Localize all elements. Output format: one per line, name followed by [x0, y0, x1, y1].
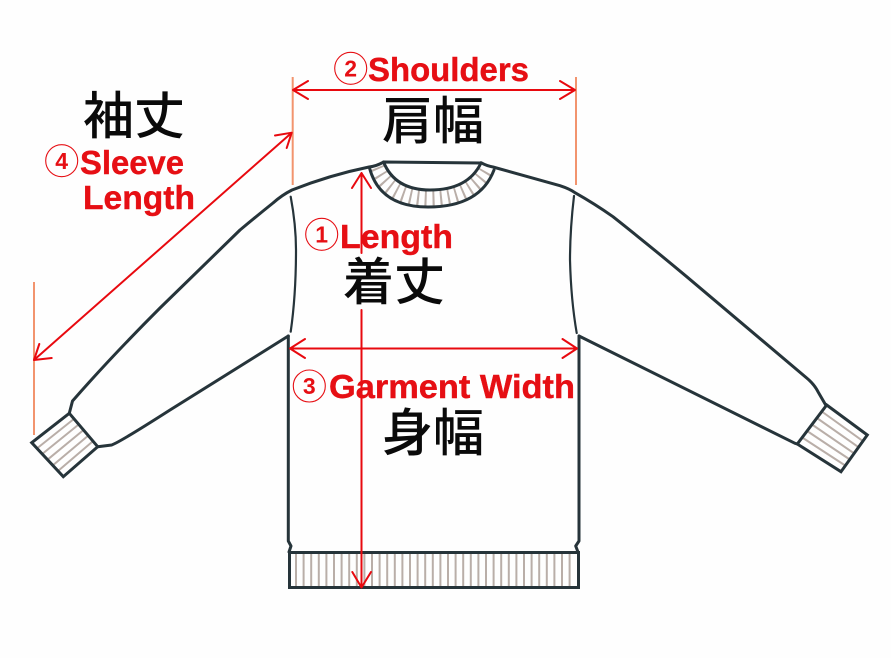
right cuff [797, 405, 867, 472]
arrow: garment width [290, 339, 577, 358]
label: sleeve length: 4 [55, 148, 68, 174]
label: sleeve length: Length [83, 179, 195, 216]
hem ribbing [290, 552, 578, 588]
arrow: shoulders [293, 81, 575, 99]
label: shoulders: 2 [344, 56, 357, 82]
label: sleeve length: Sleeve [80, 144, 184, 181]
label: length: 1 [315, 222, 328, 248]
left cuff [32, 413, 98, 477]
guide lines [34, 77, 576, 435]
label: length: Length [340, 218, 453, 255]
label: garment width: Garment Width [329, 368, 575, 405]
arrow: sleeve length [34, 133, 292, 360]
label: shoulders [335, 51, 529, 150]
label: length [306, 218, 453, 311]
sweater illustration [32, 162, 867, 588]
label: length: 着丈 [343, 254, 445, 311]
label: garment width: 3 [303, 373, 316, 399]
collar ribbing [370, 162, 494, 207]
label: garment width: 身幅 [382, 405, 484, 462]
armhole seams [291, 197, 296, 332]
body side seams [288, 336, 291, 552]
label: garment width [293, 368, 575, 462]
label: shoulders: 肩幅 [382, 93, 484, 150]
label: sleeve length: 袖丈 [83, 88, 185, 145]
label: sleeve length [46, 88, 195, 216]
body and sleeves outline [69, 162, 384, 413]
arrow: length [352, 173, 371, 588]
label: shoulders: Shoulders [368, 51, 529, 88]
